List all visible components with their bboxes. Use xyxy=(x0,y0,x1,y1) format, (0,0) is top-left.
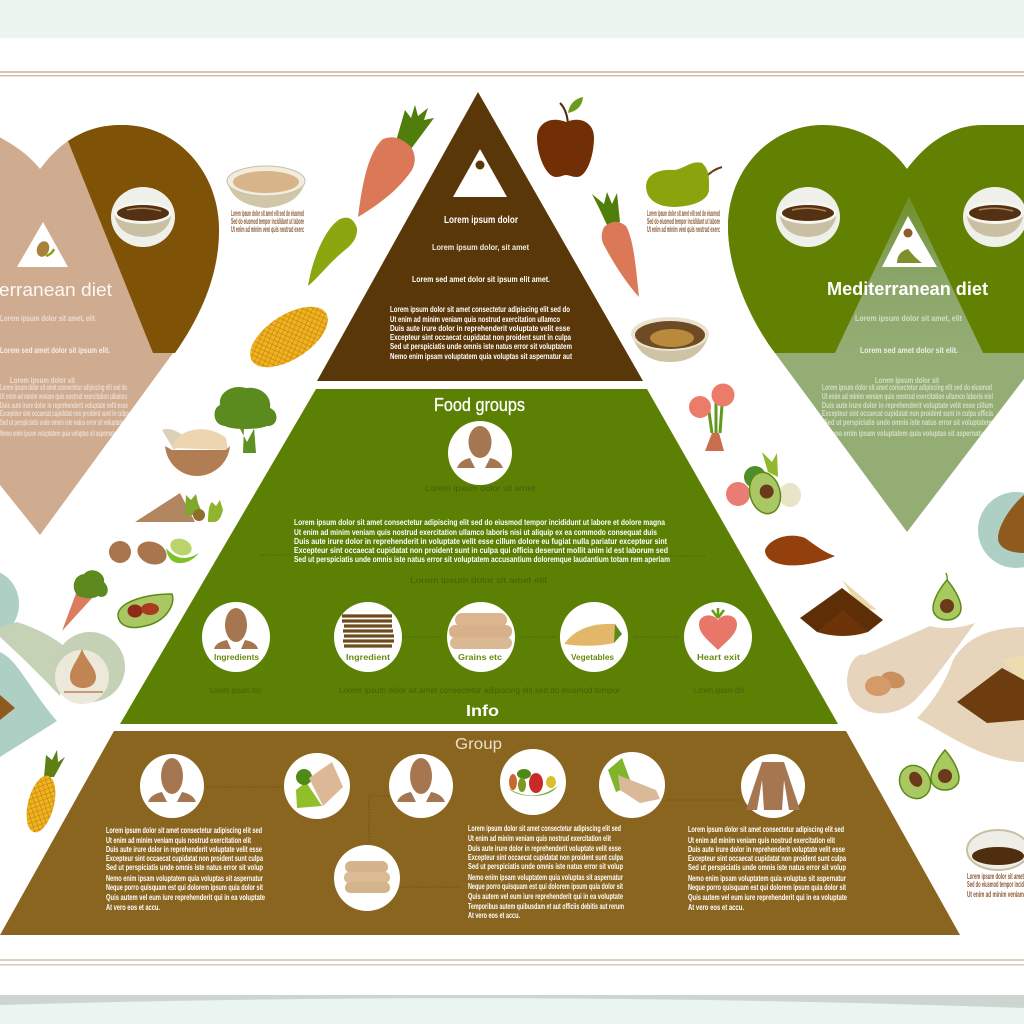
icon: salad plate xyxy=(500,749,566,815)
left heart text block: Lorem sed amet dolor sit ipsum elit. xyxy=(0,346,110,355)
bottom text block B: Duis aute irure dolor in reprehenderit voluptate velit esse xyxy=(468,844,621,853)
text: Sed do eiusmod tempor incididunt ut labore xyxy=(231,217,304,226)
top double rule xyxy=(0,71,1024,76)
top tier subheading: Lorem ipsum dolor, sit amet xyxy=(432,243,529,252)
icon: avocado pair xyxy=(894,750,959,804)
right heart text block: Lorem ipsum dolor sit xyxy=(875,376,939,385)
text: Lorem ipsum dolor sit amet elit sed do eiusmod xyxy=(231,209,304,218)
faint lower caption row: Lorem ipsum dol xyxy=(210,686,261,695)
top tier text block: Duis aute irure dolor in reprehenderit voluptate velit esse xyxy=(390,324,570,333)
icon: sweet potato xyxy=(765,536,835,565)
bottom text block C xyxy=(688,825,847,912)
icon: carrot right xyxy=(592,192,639,297)
bottom text block B xyxy=(468,824,624,920)
caption: top left bowl xyxy=(231,209,304,234)
bottom text block A: At vero eos et accu. xyxy=(106,903,160,912)
icon: heart circle: Heart exit xyxy=(697,652,740,662)
bottom text block C: At vero eos et accu. xyxy=(688,903,744,912)
bottom text block C: Ut enim ad minim veniam quis nostrud exercitation elit xyxy=(688,836,835,845)
top tier text block: Ut enim ad minim veniam quis nostrud exercitation ullamco xyxy=(390,315,560,324)
icon: stacked planks circle: Ingredient xyxy=(346,652,390,662)
icon: person circle: Ingredients xyxy=(214,652,259,662)
bottom text block B: Lorem ipsum dolor sit amet consectetur adipiscing elit sed xyxy=(468,824,621,833)
icon: triangle with nut xyxy=(17,222,68,267)
shape: tan bubble with nuts xyxy=(847,623,975,713)
bottom text block A: Excepteur sint occaecat cupidatat non proident sunt culpa xyxy=(106,854,263,863)
icon: person xyxy=(389,754,453,818)
icon: green chili xyxy=(308,218,357,286)
bottom text block B: Ut enim ad minim veniam quis nostrud exercitation elit xyxy=(468,834,611,843)
icon: broccoli xyxy=(215,387,276,453)
bottom text block A: Lorem ipsum dolor sit amet consectetur adipiscing elit sed xyxy=(106,826,262,835)
middle tier heading: Food groups xyxy=(434,395,525,415)
icon: apple xyxy=(537,97,594,177)
bottom text block B: Nemo enim ipsam voluptatem quia voluptas sit aspernatur xyxy=(468,873,623,882)
faint caption: Lorem ipsum dolor sit amet elit xyxy=(410,576,548,585)
icon: soup bowl right xyxy=(963,187,1024,247)
bottom text block C: Nemo enim ipsam voluptatem quia voluptas sit aspernatur xyxy=(688,874,846,883)
faint lower caption row: Lorem ipsum dol xyxy=(694,686,744,695)
shape: left mint lobe xyxy=(0,570,19,638)
bottom text block B: Quis autem vel eum iure reprehenderit qui in ea voluptate xyxy=(468,892,623,901)
icon: small soup bowl xyxy=(631,317,709,362)
text: Ut enim ad minim veni quis nostrud exerc xyxy=(647,225,720,234)
panel: pyramid middle tier xyxy=(120,389,838,724)
icon: drop in green bubble xyxy=(0,622,125,704)
top band xyxy=(0,0,1024,38)
right heart text block: Lorem sed amet dolor sit elit. xyxy=(860,346,958,355)
bottom band xyxy=(0,995,1024,1024)
panel: pyramid top tier xyxy=(317,92,643,381)
top tier text block xyxy=(390,305,572,361)
icon: chocolate wedges xyxy=(800,580,883,636)
text: Lorem ipsum dolor sit amet elit sed do eiusmod xyxy=(647,209,720,218)
middle tier text block: Excepteur sint occaecat cupidatat non proident sunt in culpa qui officia deserunt mollit anim id est laborum sed xyxy=(294,546,668,555)
bottom text block A: Quis autem vel eum iure reprehenderit qui in ea voluptate xyxy=(106,893,265,902)
bottom text block B: Excepteur sint occaecat cupidatat non proident sunt culpa xyxy=(468,853,623,862)
middle tier text block: Sed ut perspiciatis unde omnis iste natus error sit voluptatem accusantium doloremque laudantium totam rem aperiam xyxy=(294,555,670,564)
left heart text block: Sed ut perspiciatis unde omnis iste natus error sit voluptatem xyxy=(0,418,127,427)
light triangle xyxy=(835,197,983,353)
right heart text block xyxy=(822,314,993,438)
icon: mint circle with drop xyxy=(978,492,1024,568)
left heart text block: Lorem ipsum dolor sit amet consectetur adipiscing elit sed do xyxy=(0,383,127,392)
bottom text block A xyxy=(106,826,265,912)
icon: person xyxy=(140,754,204,818)
bottom double rule xyxy=(0,959,1024,966)
faint lower caption row xyxy=(210,686,744,695)
icon: flatbread circle xyxy=(447,602,515,672)
icon: person xyxy=(448,421,512,485)
bottom text block B: Neque porro quisquam est qui dolorem ipsum quia dolor sit xyxy=(468,882,623,891)
bottom text block B: Temporibus autem quibusdam et aut officiis debitis aut rerum xyxy=(468,902,624,911)
icon: flatbread circle: Grains etc xyxy=(458,652,502,662)
icon: green pear xyxy=(646,162,722,207)
bottom text block C: Duis aute irure dolor in reprehenderit voluptate velit esse xyxy=(688,845,845,854)
bottom text block C: Sed ut perspiciatis unde omnis iste natus error sit volup xyxy=(688,863,846,872)
top tier text block: Nemo enim ipsam voluptatem quia voluptas sit aspernatur aut xyxy=(390,352,572,361)
icon: coral tree xyxy=(689,384,734,451)
brown wedge xyxy=(68,125,219,353)
shape: large tan with brown slab xyxy=(917,627,1024,762)
icon: grain bowl xyxy=(227,166,305,208)
top tier tagline: Lorem sed amet dolor sit ipsum elit amet. xyxy=(412,275,550,284)
icon: nuts and lime xyxy=(109,536,199,568)
icon: corn standing xyxy=(21,750,65,835)
shape: lower mint lobe xyxy=(0,652,57,757)
icon: corn cob xyxy=(240,295,338,379)
icon: carrot top left xyxy=(358,105,434,217)
icon: garment xyxy=(741,754,805,818)
left heart text block: Nemo enim ipsam voluptatem quia voluptas sit aspernatur xyxy=(0,429,118,438)
left heart text block: Ut enim ad minim veniam quis nostrud exercitation ullamco xyxy=(0,392,127,401)
icon: bowl of grains xyxy=(162,429,230,476)
middle tier text block xyxy=(294,518,670,564)
icon: leafy wrap xyxy=(284,753,350,819)
caption: bottom right bowl xyxy=(967,872,1024,899)
icon: squash circle xyxy=(560,602,628,672)
left heart text block: Excepteur sint occaecat cupidatat non proident sunt in culpa xyxy=(0,409,129,418)
icon: avocado half xyxy=(118,594,173,628)
top tier text block: Lorem ipsum dolor sit amet consectetur adipiscing elit sed do xyxy=(390,305,570,314)
icon: bowl bottom right xyxy=(967,830,1024,870)
green upper band xyxy=(728,125,1024,353)
icon: white triangle with dot xyxy=(453,149,507,197)
bottom text block A: Duis aute irure dolor in reprehenderit voluptate velit esse xyxy=(106,845,262,854)
connectors xyxy=(206,787,741,887)
bottom text block C: Lorem ipsum dolor sit amet consectetur adipiscing elit sed xyxy=(688,825,844,834)
top tier text block: Excepteur sint occaecat cupidatat non proident sunt in culpa xyxy=(390,333,571,342)
faint caption: Lorem ipsum dolor sit amet xyxy=(425,484,536,493)
bottom text block C: Quis autem vel eum iure reprehenderit qui in ea voluptate xyxy=(688,893,847,902)
left heart text block xyxy=(0,314,129,438)
bottom text block B: At vero eos et accu. xyxy=(468,911,520,920)
icon: person circle xyxy=(202,602,270,672)
right heart text block: Lorem ipsum dolor sit amet, elit xyxy=(855,314,962,323)
bottom text block C: Neque porro quisquam est qui dolorem ipsum quia dolor sit xyxy=(688,883,846,892)
caption: pear xyxy=(647,209,720,234)
bottom tier heading: Group xyxy=(455,736,502,753)
bottom text block A: Nemo enim ipsam voluptatem quia voluptas sit aspernatur xyxy=(106,874,263,883)
icon: soup bowl left xyxy=(776,187,840,247)
icon: bread stack xyxy=(334,845,400,911)
top tier heading: Lorem ipsum dolor xyxy=(444,215,518,226)
faint lower caption row: Lorem ipsum dolor sit amet consectetur adipiscing elit sed do eiusmod tempor xyxy=(339,686,620,695)
faint connector strokes xyxy=(260,555,705,637)
top tier text block: Sed ut perspiciatis unde omnis iste natus error sit voluptatem xyxy=(390,342,572,351)
icon: soup bowl in circle xyxy=(111,187,175,247)
left heart text block: Lorem ipsum dolor sit amet, elit xyxy=(0,314,95,323)
middle tier text block: Lorem ipsum dolor sit amet consectetur adipiscing elit sed do eiusmod tempor incididunt ut labore et dolore magna xyxy=(294,518,665,527)
bottom text block A: Ut enim ad minim veniam quis nostrud exercitation elit xyxy=(106,836,251,845)
text: Sed do eiusmod tempor incididunt ut labore xyxy=(647,217,720,226)
panel: right heart xyxy=(728,125,1024,532)
middle tier text block: Duis aute irure dolor in reprehenderit in voluptate velit esse cillum dolore eu fugiat nulla pariatur excepteur sint xyxy=(294,537,667,546)
icon: carrot with broccoli xyxy=(62,570,108,631)
right heart title: Mediterranean diet xyxy=(827,279,988,299)
middle tier label: Info xyxy=(466,703,499,720)
panel: pyramid bottom tier xyxy=(0,731,960,935)
icon: heart circle xyxy=(684,602,752,672)
icon: wrap with leaves xyxy=(599,752,665,818)
bottom text block C: Excepteur sint occaecat cupidatat non proident sunt culpa xyxy=(688,854,846,863)
bottom text block A: Neque porro quisquam est qui dolorem ipsum quia dolor sit xyxy=(106,883,263,892)
icon: stacked planks circle xyxy=(334,602,402,672)
icon: squash circle: Vegetables xyxy=(571,652,614,662)
left heart text block: Duis aute irure dolor in reprehenderit voluptate velit esse xyxy=(0,401,128,410)
icon: wood wedge with greens xyxy=(135,493,223,522)
icon: fruit group xyxy=(726,452,801,517)
icon: triangle with blob xyxy=(882,216,937,267)
icon: avocado pear xyxy=(933,573,961,620)
left heart text block: Lorem ipsum dolor sit xyxy=(10,376,75,385)
bottom text block B: Sed ut perspiciatis unde omnis iste natus error sit volup xyxy=(468,862,623,871)
panel: left heart xyxy=(0,125,219,535)
text: Ut enim ad minim veni quis nostrud exerc xyxy=(231,225,304,234)
bottom text block A: Sed ut perspiciatis unde omnis iste natus error sit volup xyxy=(106,863,263,872)
middle tier text block: Ut enim ad minim veniam quis nostrud exercitation ullamco laboris nisi ut aliquip ex ea commodo consequat duis xyxy=(294,528,657,537)
